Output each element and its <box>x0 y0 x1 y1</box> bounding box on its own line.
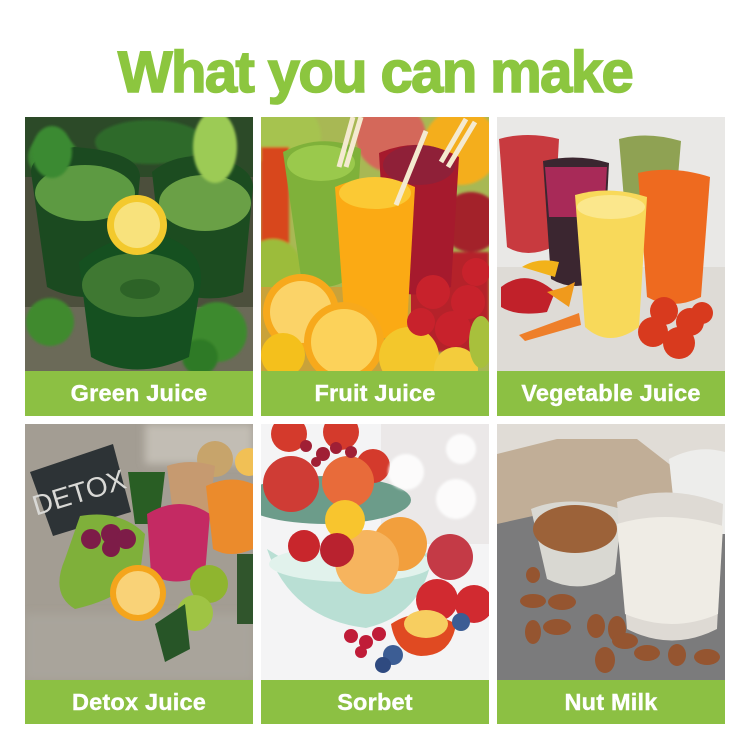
label <box>497 371 725 416</box>
panel: sorbet <box>261 424 489 724</box>
photo: vegetable juice glasses <box>497 117 725 371</box>
photo: detox ingredients <box>25 424 253 680</box>
photo: green juice glasses <box>25 117 253 371</box>
panel: detox juice <box>25 424 253 724</box>
label: Fruit Juice <box>314 380 436 406</box>
label <box>261 680 489 724</box>
label: Vegetable Juice <box>521 380 701 406</box>
label: Nut Milk <box>564 689 657 715</box>
label: Sorbet <box>337 689 413 715</box>
title: What you can make <box>118 40 632 105</box>
photo: almond milk and almonds <box>497 424 725 680</box>
label: Green Juice <box>71 380 207 406</box>
label <box>261 371 489 416</box>
panel: nut milk <box>497 424 725 724</box>
panel: fruit juice <box>261 117 489 416</box>
label <box>497 680 725 724</box>
panel: green juice <box>25 117 253 416</box>
label <box>25 371 253 416</box>
photo: sorbet bowl with fruit <box>261 424 489 680</box>
label <box>25 680 253 724</box>
sign <box>29 444 131 536</box>
photo: fruit juice glasses <box>261 117 489 371</box>
label: Detox Juice <box>72 689 206 715</box>
sign: DETOX <box>29 464 130 521</box>
panel: vegetable juice <box>497 117 725 416</box>
